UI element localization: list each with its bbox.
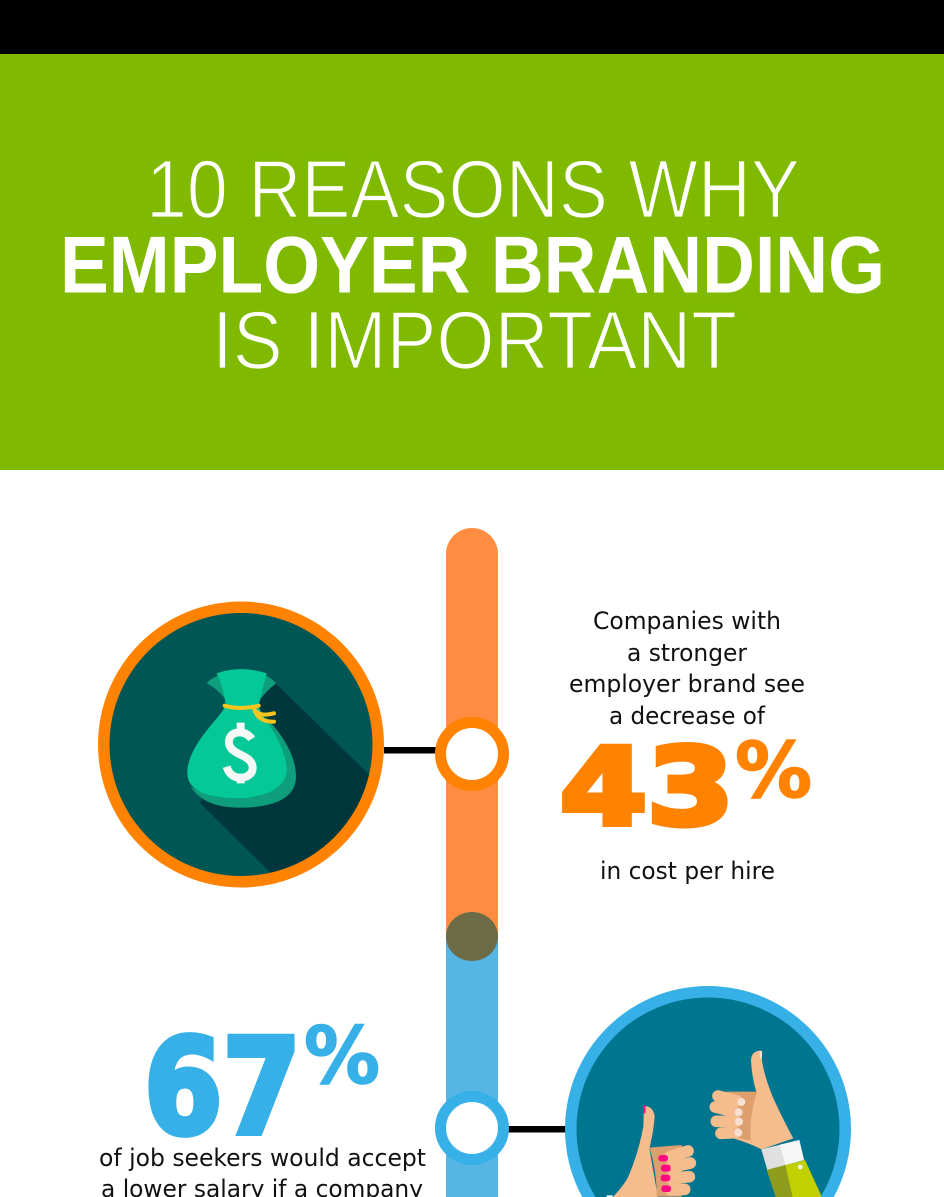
- connector 2: [507, 1126, 567, 1132]
- timeline node 1: [440, 722, 504, 786]
- percent sign: %: [304, 1012, 380, 1102]
- left hand skin: [610, 1106, 658, 1197]
- right cuff: [761, 1140, 804, 1170]
- bag flaps: [207, 675, 276, 705]
- left nails: [643, 1105, 671, 1192]
- timeline bar: [446, 528, 498, 1197]
- 43 number: 43: [560, 726, 734, 849]
- left fingers: [670, 1151, 690, 1190]
- left palm shade: [649, 1145, 682, 1197]
- text: 43 percent stat: Companies with: [593, 607, 781, 635]
- percent sign: %: [735, 727, 812, 816]
- title banner: [0, 54, 944, 470]
- long shadow: [200, 675, 369, 873]
- text: 67 percent stat: of job seekers would accept: [99, 1144, 426, 1172]
- title line 1: 10 REASONS WHY: [146, 142, 800, 236]
- right palm shade: [727, 1092, 757, 1141]
- bag body: [187, 707, 287, 798]
- right hand skin: [733, 1051, 793, 1149]
- icon: thumbs up: [565, 986, 851, 1197]
- bag neck: [217, 669, 267, 707]
- connector 1: [384, 747, 438, 754]
- icon: money bag: [98, 602, 385, 890]
- text: 43 percent stat: employer brand see: [569, 670, 805, 698]
- text: 43 percent stat: a stronger: [627, 639, 747, 667]
- text: 43 percent stat: [560, 607, 812, 885]
- dollar sign: [227, 723, 253, 783]
- top black bar: [0, 0, 944, 54]
- text: 43 percent stat: a decrease of: [609, 702, 766, 730]
- left cuff: [607, 1195, 613, 1197]
- timeline junction: [446, 912, 498, 961]
- text: 43 percent stat: in cost per hire: [600, 857, 775, 885]
- right sleeve: [767, 1160, 823, 1197]
- right fingers: [715, 1096, 737, 1133]
- drawstring: [225, 706, 274, 722]
- 67 number: 67: [144, 1011, 301, 1165]
- right fingernails: [734, 1051, 762, 1137]
- text: 67 percent stat: [99, 1011, 426, 1197]
- title line 3: IS IMPORTANT: [212, 294, 737, 386]
- bag side shade: [191, 717, 296, 808]
- timeline node 2: [440, 1096, 504, 1160]
